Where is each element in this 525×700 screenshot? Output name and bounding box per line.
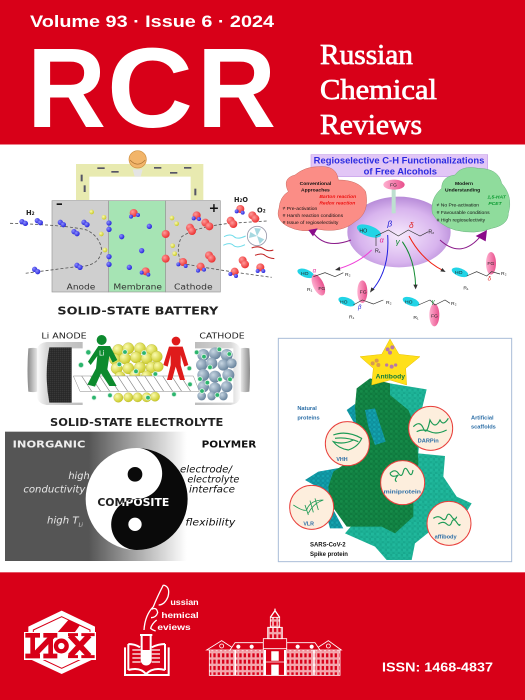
central sphere: [347, 197, 451, 267]
cloud: modern understanding: ≠ No Pre-activation: [437, 203, 479, 209]
circle: miniprotein: [381, 461, 425, 505]
journal name: [320, 40, 437, 141]
journal name: Chemical: [320, 75, 437, 106]
inorganic properties: [23, 471, 90, 529]
panel: composite electrolyte yin-yang: [5, 432, 257, 561]
product: delta: HO: [455, 270, 463, 276]
icon: walking green figure: [87, 335, 117, 387]
product: gamma: HO: [405, 299, 413, 305]
spike protein: light teal domain: [345, 383, 472, 560]
product: gamma: γ: [432, 299, 436, 305]
cloud: conventional approaches: Redox reaction: [319, 201, 355, 207]
battery labels: H₂O: [234, 195, 248, 204]
star: antibody: Antibody: [376, 375, 406, 381]
polymer properties: [180, 464, 239, 528]
product: alpha: α: [313, 269, 317, 275]
icon: cooling fan: [247, 226, 267, 246]
artificial scaffolds label: Artificial: [471, 415, 494, 421]
circle: miniprotein: miniprotein: [384, 489, 422, 495]
inorganic heading: INORGANIC: [13, 439, 85, 450]
polymer heading: POLYMER: [202, 439, 257, 450]
issue line: Volume 93 · Issue 6 · 2024: [30, 12, 275, 31]
artificial scaffolds label: scaffolds: [471, 425, 496, 431]
yin-yang symbol: [86, 448, 188, 550]
polymer properties: electrode/: [180, 464, 234, 475]
RCR logotype: [27, 25, 276, 151]
product: alpha: HO: [301, 271, 309, 277]
natural proteins label: proteins: [297, 415, 320, 421]
gradient background: [5, 432, 187, 561]
substrate: δ: [409, 220, 414, 230]
cloud: conventional approaches: Barton reaction: [319, 194, 356, 200]
cloud: modern understanding: # High regioselectivity: [437, 217, 486, 223]
spike protein label: Spike protein: [310, 552, 348, 558]
panel frame: [278, 338, 512, 562]
spike protein label: SARS-CoV-2: [310, 543, 346, 549]
yellow electrolyte particles: [109, 343, 163, 402]
cathode housing: [195, 342, 250, 405]
natural proteins label: [297, 406, 320, 421]
product: delta: δ: [488, 277, 492, 283]
journal name: Russian: [320, 40, 413, 71]
battery labels: [26, 195, 266, 291]
product: delta: R₂: [501, 271, 507, 277]
substrate: γ: [396, 237, 401, 247]
electrolyte caption: SOLID-STATE ELECTROLYTE: [50, 417, 223, 429]
title: Regioselective C-H Functionalizations: [314, 156, 484, 166]
product: delta: [450, 252, 507, 291]
inorganic properties: Li: [79, 523, 83, 529]
cloud: conventional approaches: [278, 166, 367, 231]
logo: IOCh hexagon: [24, 611, 96, 674]
natural proteins label: Natural: [297, 406, 317, 412]
product: beta: HO: [340, 299, 348, 305]
circle: affibody: [427, 501, 471, 545]
spike protein: blue left domain: [305, 404, 365, 528]
substrate: R₁: [375, 249, 381, 255]
battery labels: +: [209, 200, 219, 215]
product: gamma: [401, 295, 457, 326]
electrolyte labels: CATHODE: [199, 331, 245, 340]
roofs and gables: [207, 641, 341, 650]
substrate: [355, 219, 434, 255]
cloud: conventional approaches: # Harsh reaction conditions: [283, 213, 344, 219]
anode housing: [27, 342, 83, 405]
central tower: [263, 639, 287, 675]
circle: VHH: [325, 422, 369, 466]
product: alpha: [296, 267, 351, 298]
electrolyte labels: Li ANODE: [41, 331, 87, 340]
product: alpha: FG: [318, 286, 325, 292]
product pathway arrows: [337, 235, 443, 291]
book outline: [125, 644, 169, 675]
FG reagent: [383, 180, 405, 213]
ISSN: ISSN: 1468-4837: [382, 661, 493, 675]
circle: DARPin: [409, 406, 453, 450]
script letters: [144, 585, 169, 631]
hydrogen molecules: [19, 218, 152, 274]
cloud: conventional approaches: Approaches: [301, 188, 330, 194]
journal name: Reviews: [320, 110, 422, 141]
cloud: modern understanding: # Favourable conditions: [437, 210, 490, 216]
artificial scaffolds label: [471, 415, 496, 431]
inorganic properties: conductivity: [23, 484, 86, 495]
logo: Russian Chemical Reviews book: ussian: [170, 597, 199, 607]
panel: regioselective C-H functionalization: [278, 155, 510, 326]
inorganic properties: high: [68, 471, 90, 482]
panel: solid-state electrolyte: [27, 331, 250, 429]
spike protein label: [310, 543, 348, 558]
RCR logotype: C: [107, 25, 193, 151]
circle: affibody: affibody: [435, 534, 458, 540]
wings: [209, 650, 340, 675]
logo: university building: [207, 609, 341, 675]
oxygen and water molecules: [130, 205, 264, 276]
product: delta: R₁: [463, 285, 469, 291]
panel: antibody alternatives protein tree: [278, 338, 512, 562]
title: [314, 156, 484, 177]
cloud: modern understanding: [432, 167, 510, 232]
title: of Free Alcohols: [364, 167, 437, 177]
spike protein: dark green domain: [328, 378, 418, 533]
letter band: [24, 632, 96, 660]
title box: [311, 155, 488, 177]
composite label: [98, 498, 168, 506]
battery labels: Anode: [67, 281, 95, 291]
circle: DARPin: DARPin: [418, 438, 439, 444]
substrate: α: [380, 236, 385, 245]
battery labels: Cathode: [174, 281, 213, 291]
composite label: COMPOSITE: [97, 496, 169, 509]
substrate: HO: [359, 229, 367, 235]
icon: light bulb: [129, 151, 146, 177]
logo: Russian Chemical Reviews book: eviews: [157, 622, 191, 632]
battery labels: Membrane: [113, 281, 162, 291]
gas flow paths: [10, 221, 272, 277]
icon: standing red figure: [163, 337, 188, 380]
cathode block: [166, 201, 220, 292]
water hydrogens: [129, 209, 265, 278]
electrolyte labels: [41, 331, 245, 429]
FG reagent: FG: [390, 183, 397, 189]
RCR logotype: R: [197, 25, 276, 151]
cloud: modern understanding: Modern: [455, 181, 473, 187]
polymer properties: interface: [189, 484, 235, 495]
purple curved arrows: [312, 232, 482, 249]
product: beta: [337, 280, 392, 320]
electron markers on circuit: [81, 167, 196, 195]
product: alpha: R₁: [307, 287, 313, 293]
star: antibody: [360, 339, 420, 385]
circle: VHH: VHH: [336, 457, 348, 463]
substrate: β: [386, 219, 392, 229]
hexagon body: [28, 611, 95, 674]
cloud: conventional approaches: # Issue of regioselectivity: [283, 220, 339, 226]
spike protein: blue central strip: [365, 408, 386, 445]
substrate: R₂: [428, 229, 434, 235]
product: alpha: R₂: [345, 272, 351, 278]
product: beta: R₁: [349, 314, 355, 320]
logo: Russian Chemical Reviews book: [125, 585, 199, 675]
product: gamma: R₂: [451, 301, 457, 307]
lithium metal: [47, 347, 72, 403]
icon: walking green figure: Li: [99, 349, 105, 357]
test tube: [140, 635, 152, 664]
polymer properties: electrolyte: [187, 474, 239, 485]
cloud: conventional approaches: Conventional: [300, 181, 332, 187]
membrane block: [109, 201, 166, 292]
cooling and heat arrows: [223, 235, 274, 259]
battery labels: O₂: [257, 206, 266, 215]
logo: Russian Chemical Reviews book: hemical: [161, 610, 199, 620]
composite label: COMPOSITE: [97, 496, 169, 509]
electrons: [89, 210, 179, 256]
cathode particles: [196, 347, 237, 400]
panel: solid-state battery: [10, 151, 274, 317]
product: gamma: FG: [431, 314, 438, 320]
battery labels: H₂: [26, 208, 35, 217]
cloud: modern understanding: PCET: [488, 201, 503, 207]
header band: [0, 0, 525, 151]
letters: [25, 635, 95, 657]
footer band: [0, 572, 525, 700]
circle: VLR: VLR: [303, 521, 314, 527]
RCR logotype: R: [27, 25, 106, 151]
inorganic properties: high T: [47, 515, 80, 526]
cloud: modern understanding: 1,5-HAT: [487, 194, 507, 200]
product: beta: β: [357, 305, 362, 311]
anode block: [52, 201, 109, 292]
cloud: modern understanding: Understanding: [445, 188, 480, 194]
product: beta: FG: [360, 289, 367, 295]
hatched polymer strip: [73, 376, 199, 391]
product: beta: R₂: [386, 300, 392, 306]
product: gamma: R₁: [413, 315, 419, 321]
circle: VLR: [290, 485, 334, 529]
cloud: conventional approaches: ≠ Pre-activation: [283, 206, 317, 212]
product: delta: FG: [487, 261, 494, 267]
lithium ions: [78, 347, 232, 400]
battery caption: SOLID-STATE BATTERY: [57, 305, 219, 317]
polymer properties: flexibility: [185, 517, 236, 528]
external circuit: [76, 164, 203, 200]
